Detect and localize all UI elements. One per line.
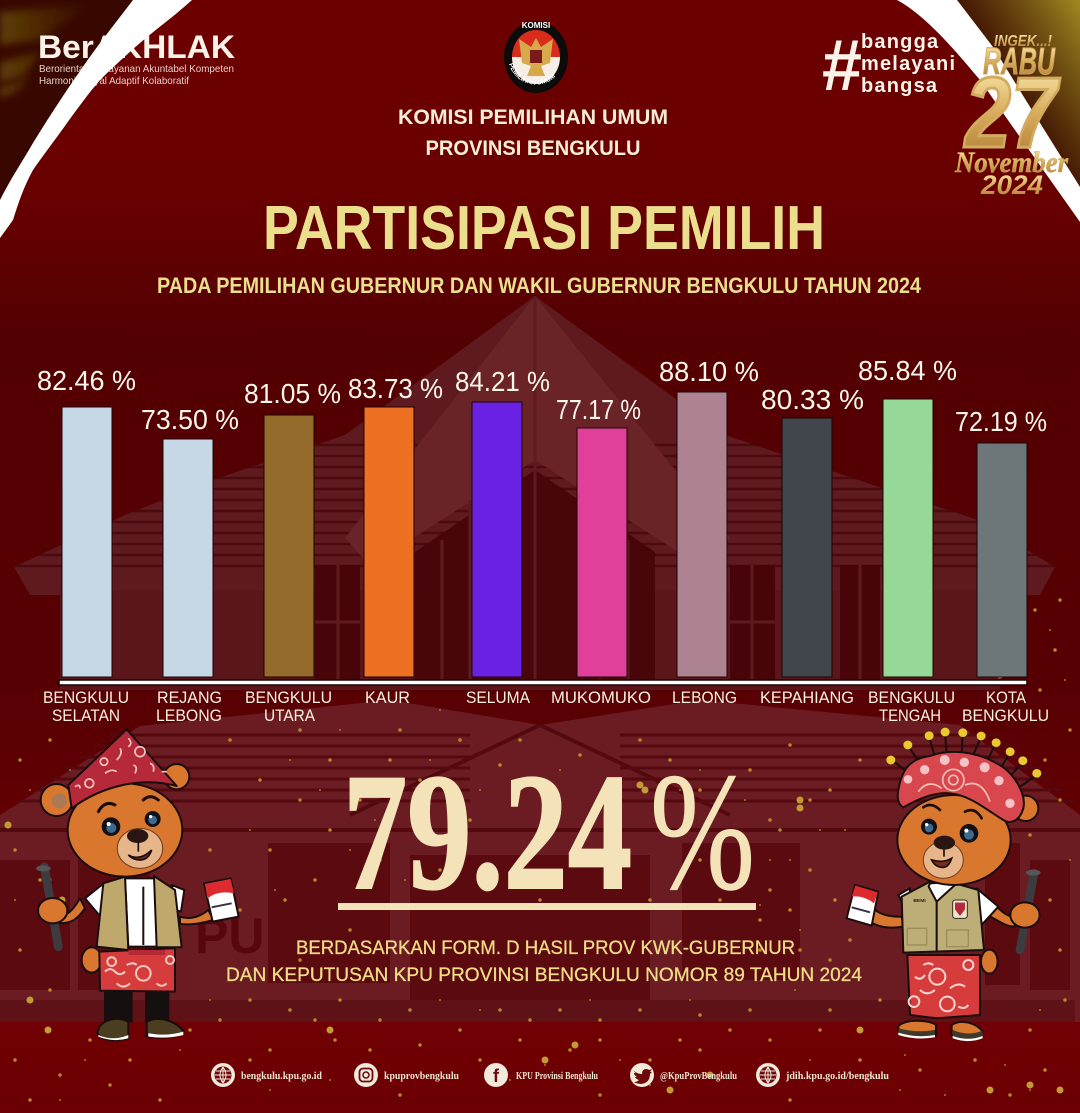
category labels: SELUMA bbox=[466, 688, 531, 707]
top-left corner glow bbox=[0, 0, 140, 210]
source note: BERDASARKAN FORM. D HASIL PROV KWK-GUBERNUR bbox=[296, 938, 795, 959]
jdih link: jdih.kpu.go.id/bengkulu bbox=[785, 1070, 889, 1082]
bar: Mukomuko bbox=[577, 428, 627, 677]
category labels: KOTA bbox=[986, 688, 1027, 707]
twitter link bbox=[630, 1063, 737, 1087]
category labels: SELATAN bbox=[52, 706, 120, 725]
KPU logo: KOMISI bbox=[522, 21, 550, 30]
building sign text: PU bbox=[195, 908, 264, 964]
facebook link: KPU Provinsi Bengkulu bbox=[516, 1070, 598, 1082]
chart baseline bbox=[59, 680, 1027, 685]
total participation: 79.24 bbox=[343, 740, 632, 925]
value labels: 80.33 % bbox=[761, 384, 864, 415]
berAKHLAK logo: Berorientasi Pelayanan Akuntabel Kompeten bbox=[39, 63, 234, 75]
building illustration bbox=[0, 296, 1080, 1022]
mascot: right bear: BEMI bbox=[913, 898, 926, 904]
gold date badge: November bbox=[954, 146, 1068, 179]
category labels: UTARA bbox=[264, 706, 316, 725]
white arc left bbox=[0, 0, 192, 238]
top-right corner glow bbox=[950, 0, 1080, 205]
mascot: right bear bbox=[847, 732, 1041, 1041]
hashtag bangga melayani bangsa: bangga bbox=[861, 31, 939, 53]
hashtag bangga melayani bangsa: # bbox=[822, 26, 862, 106]
value labels: 84.21 % bbox=[455, 366, 550, 397]
hashtag bangga melayani bangsa: melayani bbox=[861, 53, 956, 75]
white arc right bbox=[897, 0, 1080, 222]
value labels: 77.17 % bbox=[556, 394, 641, 425]
bar: Rejang Lebong bbox=[163, 439, 213, 677]
category labels: KAUR bbox=[365, 688, 410, 707]
category labels: BENGKULU bbox=[245, 688, 332, 707]
bar: Bengkulu Selatan bbox=[62, 407, 112, 677]
gold date badge: INGEK...! bbox=[994, 33, 1053, 50]
bar: Lebong bbox=[677, 392, 727, 677]
bar: Kota Bengkulu bbox=[977, 443, 1027, 677]
bar: Seluma bbox=[472, 402, 522, 677]
KPU logo bbox=[504, 21, 568, 93]
value labels: 83.73 % bbox=[348, 373, 443, 404]
subtitle: PADA PEMILIHAN GUBERNUR DAN WAKIL GUBERNUR BENGKULU TAHUN 2024 bbox=[157, 273, 922, 298]
value labels: 85.84 % bbox=[858, 355, 957, 386]
twitter link: @KpuProvBengkulu bbox=[660, 1070, 737, 1082]
category labels: BENGKULU bbox=[962, 706, 1049, 725]
source note bbox=[226, 938, 862, 986]
underline bbox=[338, 903, 756, 910]
category labels bbox=[43, 688, 1049, 725]
footer social links bbox=[211, 1063, 889, 1087]
category labels: MUKOMUKO bbox=[551, 688, 651, 707]
website link: bengkulu.kpu.go.id bbox=[241, 1070, 322, 1082]
jdih link bbox=[756, 1063, 889, 1087]
facebook link: f bbox=[493, 1066, 500, 1086]
category labels: LEBONG bbox=[156, 706, 222, 725]
bar: Bengkulu Tengah bbox=[883, 399, 933, 677]
berAKHLAK logo: BerAKHLAK bbox=[38, 29, 235, 65]
facebook link bbox=[484, 1063, 598, 1087]
KPU logo: PEMILIHAN UMUM bbox=[509, 63, 556, 85]
berAKHLAK logo bbox=[38, 29, 235, 87]
value labels: 88.10 % bbox=[659, 356, 759, 387]
bar: Bengkulu Utara bbox=[264, 415, 314, 677]
total participation: % bbox=[650, 739, 755, 925]
mascot: left bear bbox=[36, 729, 239, 1040]
website link bbox=[211, 1063, 322, 1087]
instagram link: kpuprovbengkulu bbox=[384, 1070, 459, 1082]
title: PARTISIPASI PEMILIH bbox=[263, 194, 825, 263]
lower building bbox=[0, 700, 1080, 1022]
hashtag bangga melayani bangsa bbox=[822, 26, 956, 106]
category labels: BENGKULU bbox=[868, 688, 955, 707]
berAKHLAK logo: Harmonis Loyal Adaptif Kolaboratif bbox=[39, 75, 189, 87]
value labels bbox=[37, 355, 1047, 437]
bar: Kaur bbox=[364, 407, 414, 677]
gold date badge bbox=[954, 33, 1068, 200]
instagram link bbox=[354, 1063, 459, 1087]
bar: Kepahiang bbox=[782, 418, 832, 677]
hashtag bangga melayani bangsa: bangsa bbox=[861, 75, 938, 97]
category labels: TENGAH bbox=[879, 706, 941, 725]
value labels: 82.46 % bbox=[37, 365, 136, 396]
heading: institution: KOMISI PEMILIHAN UMUM bbox=[398, 106, 668, 129]
glitter bbox=[8, 600, 1070, 1100]
category labels: LEBONG bbox=[672, 688, 737, 707]
bar chart bbox=[37, 355, 1049, 725]
value labels: 73.50 % bbox=[141, 404, 239, 435]
category labels: BENGKULU bbox=[43, 688, 129, 707]
value labels: 81.05 % bbox=[244, 378, 341, 409]
upper building roof bbox=[14, 296, 1055, 595]
source note: DAN KEPUTUSAN KPU PROVINSI BENGKULU NOMOR 89 TAHUN 2024 bbox=[226, 965, 862, 986]
category labels: KEPAHIANG bbox=[760, 688, 854, 707]
gold date badge: 27 bbox=[963, 57, 1061, 169]
heading: institution bbox=[398, 106, 668, 160]
value labels: 72.19 % bbox=[955, 406, 1047, 437]
category labels: REJANG bbox=[157, 688, 222, 707]
heading: institution: PROVINSI BENGKULU bbox=[426, 137, 640, 160]
gold date badge: 2024 bbox=[980, 170, 1043, 200]
